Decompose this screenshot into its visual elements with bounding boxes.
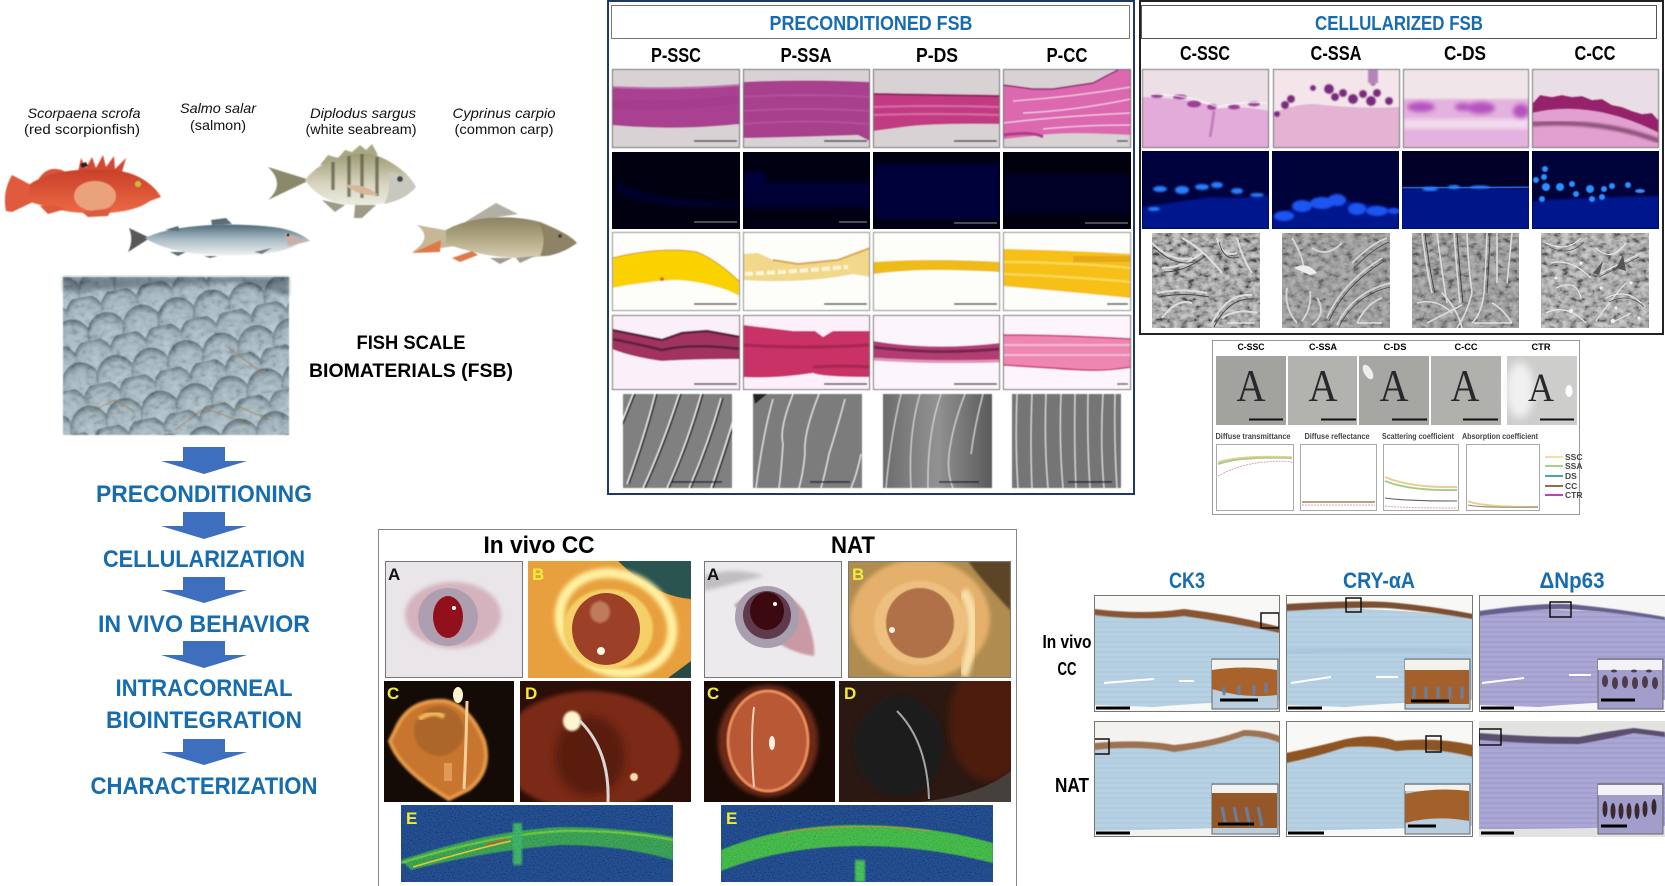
sample labels: CTR (1532, 342, 1551, 353)
chart titles: Diffuse reflectance (1304, 432, 1370, 441)
heading: NAT: NAT (831, 532, 875, 559)
arrow 5 (161, 739, 247, 765)
row: SEM of preconditioned scales (613, 394, 1121, 488)
chart titles: Diffuse transmittance (1216, 432, 1291, 441)
row: cellular H&E (1142, 69, 1659, 148)
row: DAPI fluorescence (612, 152, 1131, 229)
panel: cellularized FSB (1140, 1, 1663, 334)
column labels: C-SSA (1310, 43, 1362, 65)
column labels (1180, 43, 1616, 65)
row labels: CC (1058, 659, 1076, 679)
label: Cyprinus carpio (452, 105, 556, 137)
legend: SSC (1565, 452, 1582, 462)
arrow 3 (161, 577, 247, 603)
photos: letter A through samples: A (1308, 360, 1338, 411)
photo A: in vivo CC: A (388, 565, 400, 584)
column labels: P-DS (916, 45, 958, 67)
sample labels: C-SSA (1309, 342, 1337, 353)
column labels: C-SSC (1180, 43, 1230, 65)
flow: process steps (90, 447, 318, 800)
photo C: in vivo CC (384, 681, 514, 802)
photo E: in vivo CC OCT: E (406, 809, 417, 828)
panel: fish species (5, 100, 577, 264)
chart titles (1216, 432, 1538, 441)
step: cellularization: CELLULARIZATION (103, 546, 305, 573)
photo D: in vivo CC (520, 681, 691, 802)
arrow 4 (161, 641, 247, 668)
row labels: In vivo (1042, 632, 1092, 652)
heading: In vivo CC: In vivo CC (484, 532, 594, 559)
panel: immunohistochemistry (1042, 568, 1665, 837)
photo A: in vivo CC (385, 561, 523, 678)
tissue: deltaNp63 in vivo (1479, 595, 1665, 712)
photos: letter A through samples: A (1380, 360, 1408, 411)
headings: markers: CK3 (1169, 568, 1205, 593)
step: intracorneal biointegration (106, 675, 302, 734)
heading: fish scale biomaterials: FISH SCALE (356, 333, 466, 354)
photo C: in vivo CC: C (387, 684, 399, 703)
panel: transparency and optics (1212, 340, 1582, 514)
row labels: NAT (1055, 775, 1089, 797)
photos: letter A through samples: A (1236, 360, 1266, 411)
heading: cellularized FSB: CELLULARIZED FSB (1315, 13, 1483, 35)
label: Scorpaena scrofa: (red scorpionfish) (24, 121, 140, 137)
label: Diplodus sargus (306, 105, 416, 137)
label: Cyprinus carpio: (common carp) (454, 121, 554, 137)
panel: in vivo eye imaging (378, 530, 1029, 886)
photo B: in vivo CC: B (532, 565, 544, 584)
panel: preconditioned FSB (608, 1, 1134, 494)
step: intracorneal biointegration: BIOINTEGRATION (106, 707, 302, 734)
photo E: NAT OCT: E (726, 809, 737, 828)
label: Scorpaena scrofa (24, 105, 141, 137)
row: cellular SEM (1152, 233, 1649, 328)
heading: preconditioned FSB: PRECONDITIONED FSB (770, 13, 972, 35)
step: in vivo behavior: IN VIVO BEHAVIOR (98, 611, 310, 638)
step: preconditioning: PRECONDITIONING (96, 481, 312, 508)
headings: markers (1169, 568, 1604, 593)
column labels: C-CC (1574, 43, 1616, 65)
photo B: NAT (848, 561, 1011, 678)
tissue: deltaNp63 native (1479, 721, 1665, 837)
heading: fish scale biomaterials (309, 333, 513, 382)
row: picrosirius yellow (612, 232, 1131, 311)
column labels (651, 45, 1088, 67)
photo C: NAT (704, 681, 835, 802)
photo D: NAT (839, 681, 1011, 802)
sample labels: C-SSC (1238, 342, 1265, 353)
label: Diplodus sargus: Diplodus sargus (310, 105, 416, 121)
photos: letter A through samples (1216, 356, 1577, 425)
tissue: CK3 native (1094, 721, 1280, 837)
label: Salmo salar: Salmo salar (180, 100, 257, 116)
icon: white seabream (268, 144, 416, 218)
photo: fish scale texture (63, 277, 289, 435)
row labels (1042, 632, 1092, 797)
tissue: CK3 in vivo (1094, 595, 1280, 712)
row: cellular DAPI (1142, 151, 1659, 229)
arrow 1 (161, 447, 247, 474)
step: intracorneal biointegration: INTRACORNEAL (116, 675, 292, 702)
row: H&E stain (612, 69, 1131, 148)
chart: diffuse transmittance (1216, 444, 1294, 510)
tissue: CRY-alpha-A native (1286, 721, 1473, 837)
headings: markers: ΔNp63 (1540, 568, 1604, 593)
row: H&E pink (612, 315, 1131, 390)
photo E: in vivo CC OCT (401, 805, 673, 882)
photo B: in vivo CC (528, 561, 691, 678)
tissue: CRY-alpha-A in vivo (1286, 595, 1473, 712)
column labels: P-CC (1046, 45, 1088, 67)
label: Scorpaena scrofa: Scorpaena scrofa (28, 105, 141, 121)
column labels: P-SSA (780, 45, 832, 67)
sample labels (1238, 342, 1551, 353)
step: characterization: CHARACTERIZATION (90, 773, 318, 800)
legend: SSA (1565, 461, 1582, 471)
legend: CC (1565, 481, 1577, 491)
icon: salmon (128, 218, 310, 258)
label: Cyprinus carpio: Cyprinus carpio (452, 105, 556, 121)
legend (1545, 452, 1582, 500)
photo D: in vivo CC: D (525, 684, 537, 703)
photos: letter A through samples: A (1528, 365, 1554, 410)
heading: fish scale biomaterials: BIOMATERIALS (FSB) (309, 361, 513, 382)
icon: red scorpionfish (5, 155, 161, 217)
legend: CTR (1565, 490, 1582, 500)
chart: absorption coefficient (1466, 444, 1540, 510)
headings: markers: CRY-αA (1343, 568, 1415, 593)
chart titles: Absorption coefficient (1462, 432, 1538, 441)
sample labels: C-CC (1454, 342, 1478, 353)
photo D: NAT: D (844, 684, 856, 703)
label: Salmo salar (180, 100, 257, 133)
sample labels: C-DS (1384, 342, 1406, 353)
photos: letter A through samples: A (1450, 360, 1480, 411)
arrow 2 (161, 512, 247, 539)
column labels: P-SSC (651, 45, 701, 67)
photo B: NAT: B (852, 565, 864, 584)
legend: DS (1565, 471, 1577, 481)
chart: diffuse reflectance (1300, 444, 1376, 510)
label: Diplodus sargus: (white seabream) (306, 121, 416, 137)
photo C: NAT: C (707, 684, 719, 703)
photo A: NAT (704, 561, 842, 678)
photo A: NAT: A (707, 565, 719, 584)
label: Salmo salar: (salmon) (190, 117, 246, 133)
chart: scattering coefficient (1384, 444, 1458, 510)
icon: common carp (412, 203, 577, 264)
photo E: NAT OCT (721, 805, 993, 882)
column labels: C-DS (1444, 43, 1486, 65)
chart titles: Scattering coefficient (1382, 432, 1454, 441)
